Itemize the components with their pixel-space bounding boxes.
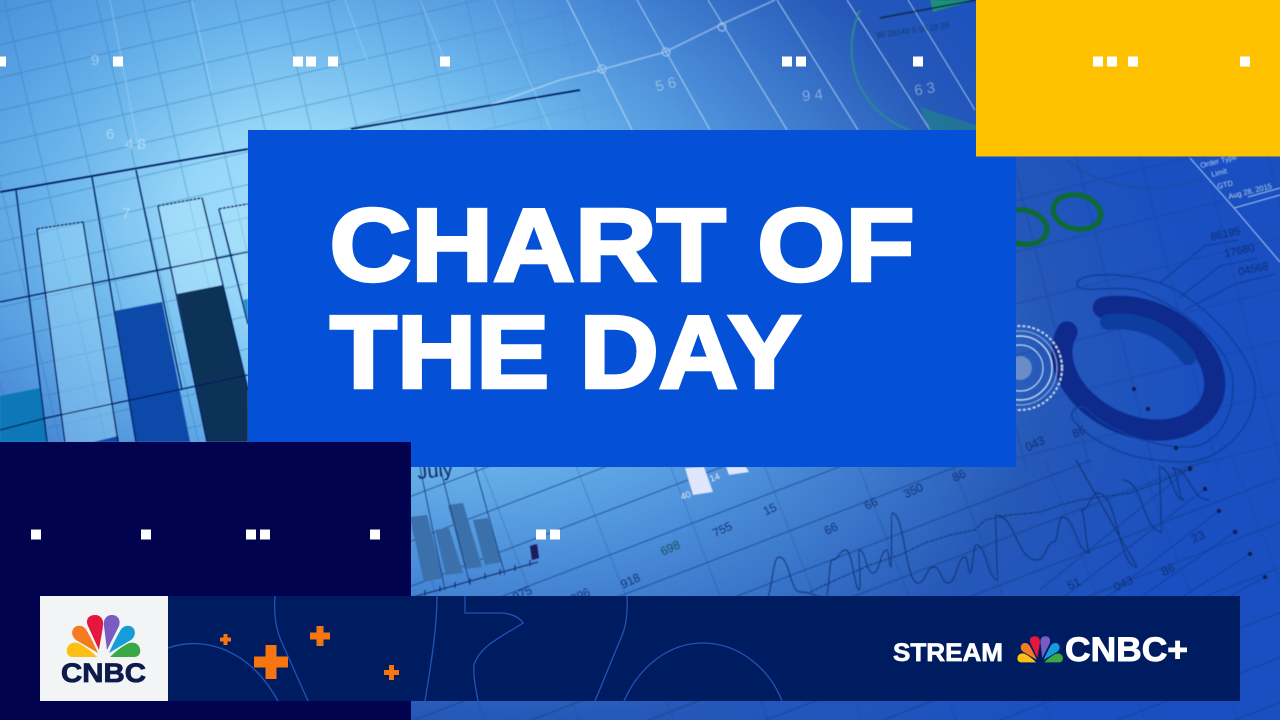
scale numbers on the waveform chart: 975 (510, 583, 535, 604)
icon: small peacock (1017, 636, 1063, 662)
scale numbers on the waveform chart: 043 (1023, 433, 1047, 454)
faint background numbers: 4 8 (125, 136, 146, 153)
lower bar chart labelled July: 14 (708, 471, 721, 484)
scale numbers on the waveform chart: 755 (710, 519, 735, 540)
background: blue chart collage: 86195 (1209, 225, 1242, 243)
title: THE DAY (330, 294, 801, 410)
left bar chart (0, 90, 580, 442)
arc beneath the yellow panel (1067, 160, 1203, 188)
left perspective grid (0, 0, 550, 442)
panel: CNBC logo tile (40, 596, 168, 701)
donut gauge (1062, 240, 1275, 462)
icon: orange plus signs (220, 626, 399, 680)
white square markers: top row (0, 56, 1250, 66)
scale numbers on the waveform chart: 86 (1159, 560, 1177, 579)
order table (1190, 152, 1280, 262)
text: CNBC wordmark: CNBC (61, 658, 146, 688)
lower bar chart labelled July (410, 458, 749, 598)
scale numbers on the waveform chart: 350 (901, 480, 926, 501)
background: blue chart collage: 04568 (1237, 260, 1270, 278)
title (330, 188, 914, 410)
faint background numbers: 6 (106, 126, 114, 143)
scale numbers on the waveform chart: 23 (1189, 527, 1207, 546)
scale numbers on the waveform chart: 15 (761, 500, 779, 518)
waveform lines (765, 460, 1265, 640)
scale numbers on the waveform chart (510, 422, 1207, 606)
faint background numbers: 9 4 (801, 86, 824, 105)
lower right grid lines (411, 460, 1280, 720)
upper right grid lines (1010, 150, 1280, 470)
scale numbers on the waveform chart: 698 (658, 537, 683, 559)
panel: bottom banner (40, 596, 1240, 701)
lower bar chart labelled July: 40 (679, 489, 692, 502)
order table: Aug 28, 2015 (1227, 181, 1273, 201)
banner contour lines (168, 596, 782, 701)
scale numbers on the waveform chart: 51 (1065, 574, 1083, 593)
panel: navy block lower left (0, 442, 411, 720)
background: blue chart collage: 17680 (1223, 242, 1256, 260)
scale numbers on the waveform chart: 86 (1070, 422, 1088, 441)
lower bar chart labelled July: July (416, 458, 454, 484)
scale numbers on the waveform chart: 043 (1111, 573, 1136, 594)
faint background numbers: 6 3 (913, 79, 936, 100)
icon: peacock (67, 615, 140, 657)
teal gauge arc, top centre right: 96 25148 0 56 18 26 (876, 21, 951, 40)
faint background numbers (91, 52, 936, 222)
title: CHART OF (330, 188, 914, 302)
scale numbers on the waveform chart: 66 (862, 494, 880, 513)
scale numbers on the waveform chart: 918 (618, 570, 643, 591)
scale numbers on the waveform chart: 66 (822, 519, 840, 538)
panel: title block (248, 130, 1016, 467)
order table: Order Type (1199, 152, 1238, 170)
scale numbers on the waveform chart: 396 (568, 585, 593, 606)
white square markers: lower row (31, 530, 560, 540)
white target rings (978, 326, 1062, 410)
text: stream CNBC+: CNBC+ (1065, 631, 1188, 669)
order table: GTD (1216, 178, 1234, 191)
scale numbers on the waveform chart: 86 (950, 466, 968, 485)
faint background numbers: 7 (122, 205, 130, 222)
text: stream CNBC+: STREAM (893, 639, 1003, 667)
pale rule lines on the left (110, 0, 551, 150)
pale diagonal rule lines, centre (490, 0, 975, 130)
panel: yellow corner block (976, 0, 1280, 156)
faint background numbers: 9 (91, 52, 99, 69)
green ring gauges (996, 190, 1104, 249)
teal gauge arc, top centre right (852, 0, 976, 132)
text: stream CNBC+ (893, 631, 1188, 669)
faint background numbers: 5 6 (654, 74, 678, 96)
order table: Limit (1210, 166, 1229, 179)
